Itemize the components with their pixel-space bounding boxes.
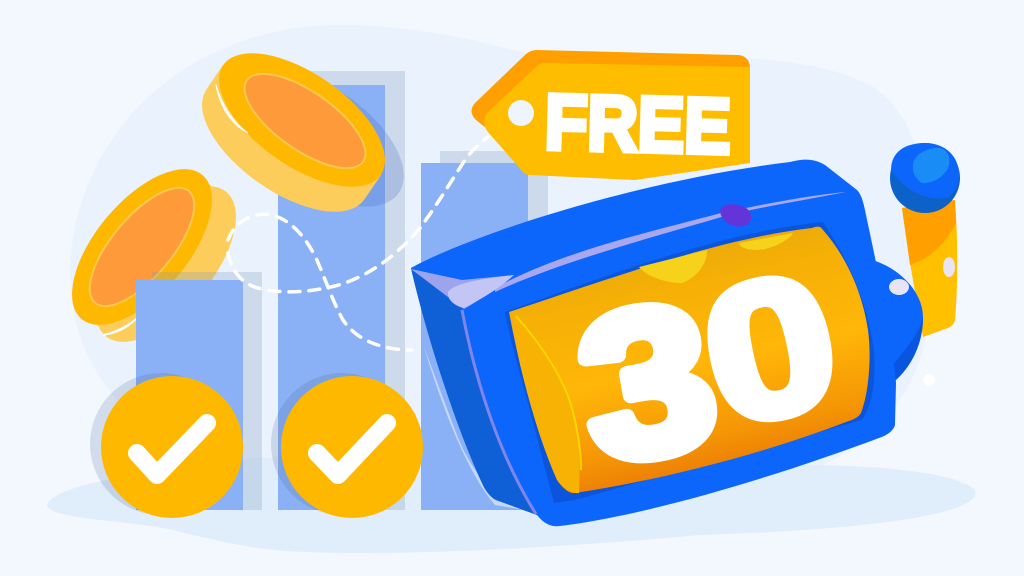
dashed paths	[228, 137, 488, 350]
tag hole	[508, 100, 534, 126]
checkmark	[317, 423, 387, 475]
reel yellow highlights	[639, 250, 707, 283]
top ridge highlight	[495, 192, 846, 292]
coin face	[197, 27, 407, 213]
bars	[136, 85, 528, 510]
check badge middle	[271, 373, 423, 518]
FREE text: FREE	[544, 78, 732, 170]
main body	[411, 160, 896, 526]
lever arm	[902, 200, 957, 337]
coin shadow on bar	[213, 42, 427, 234]
lever	[860, 143, 960, 386]
coin: lower left	[46, 145, 262, 366]
price tag: FREE	[472, 50, 750, 180]
light edge under machine	[424, 347, 525, 510]
left side face	[411, 268, 537, 515]
check badge left	[90, 373, 243, 518]
number 3: 3	[564, 259, 731, 506]
coin side	[180, 52, 390, 238]
reel fold	[514, 313, 579, 493]
slot machine	[411, 160, 896, 526]
coin side	[70, 162, 262, 366]
bar chart	[136, 71, 548, 510]
coin: upper	[180, 27, 407, 238]
lever base	[860, 259, 923, 385]
bar shadows	[152, 71, 548, 510]
background blob	[70, 25, 933, 515]
number 0: 0	[685, 230, 855, 467]
lever dot	[943, 257, 955, 277]
coin face	[46, 145, 238, 349]
checkmark	[137, 423, 207, 475]
ground shadow	[47, 457, 976, 553]
purple gem	[720, 204, 751, 227]
reel frame	[505, 222, 874, 503]
lever knob	[890, 143, 960, 213]
reel	[509, 227, 870, 493]
